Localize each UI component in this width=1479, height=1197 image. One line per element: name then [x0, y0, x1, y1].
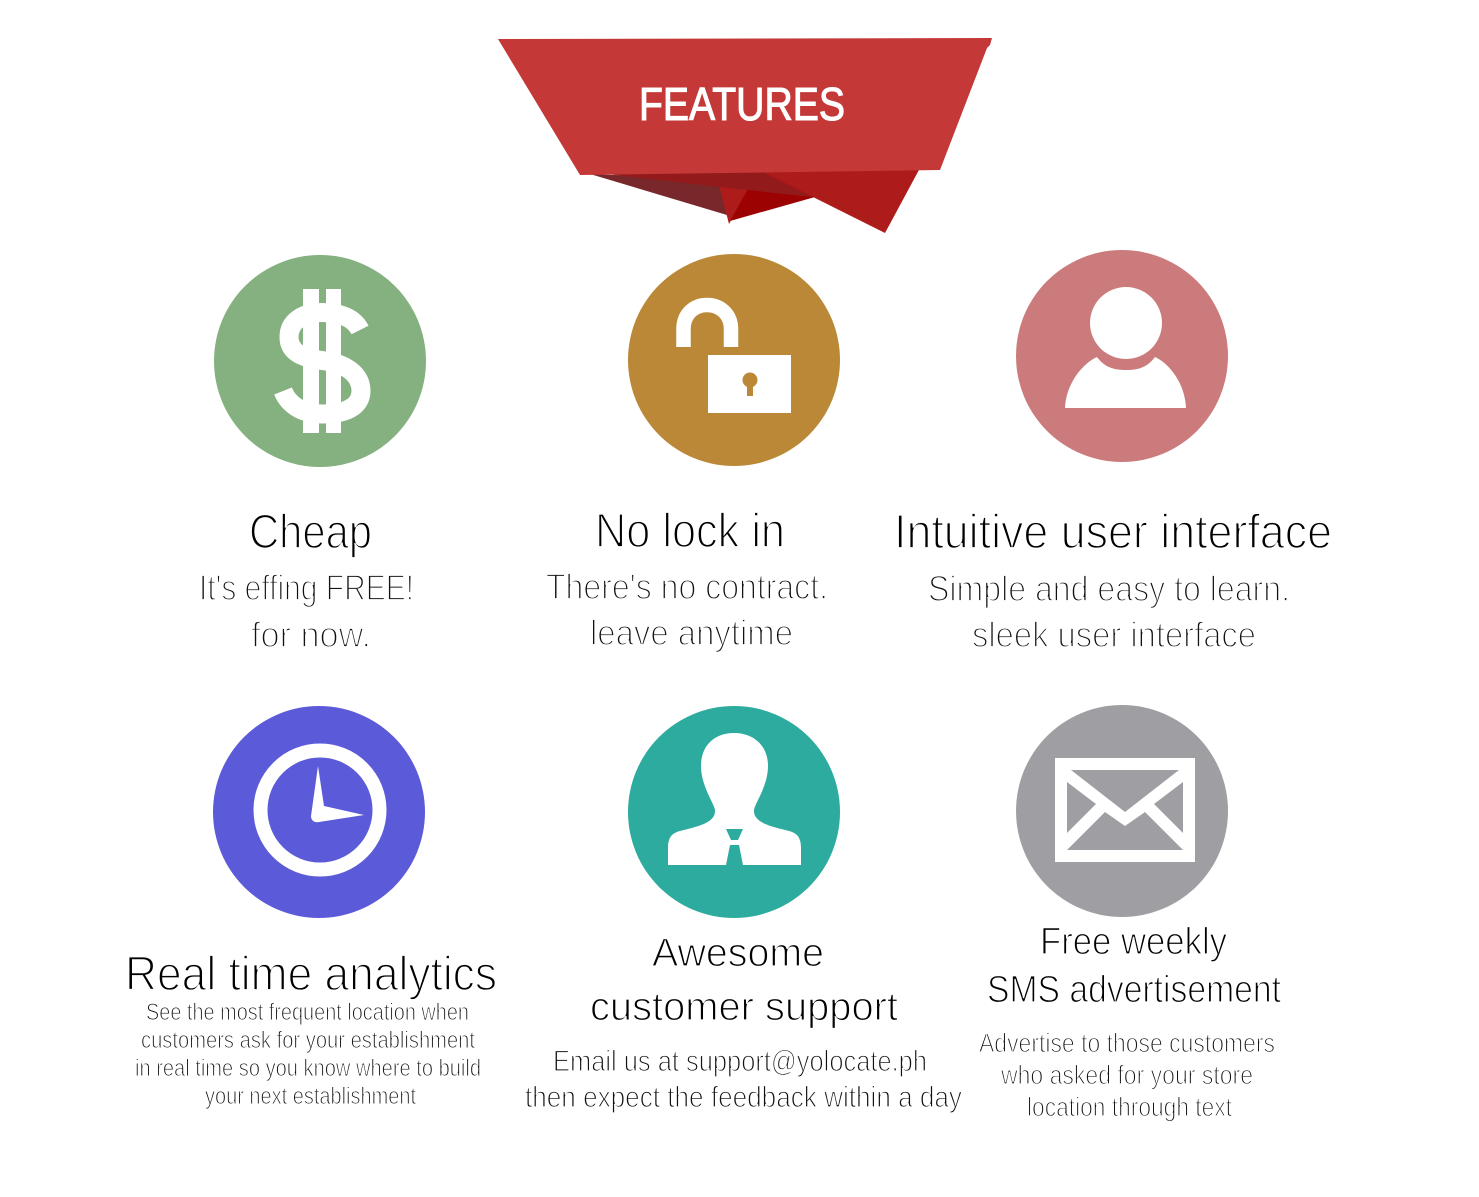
description: sleek user interface: [972, 614, 1256, 655]
panel: awesome customer support: [525, 706, 962, 1114]
heading: Awesome: [652, 931, 824, 975]
description: [525, 1045, 962, 1114]
description: then expect the feedback within a day: [525, 1081, 962, 1114]
heading: Free weekly: [1040, 921, 1227, 963]
icon: open padlock: [628, 254, 840, 466]
description: [546, 566, 828, 653]
heading: [987, 921, 1281, 1011]
panel: no lock in: [546, 254, 840, 653]
description: your next establishment: [205, 1083, 416, 1110]
description: [979, 1028, 1275, 1122]
description: [135, 999, 481, 1110]
description: leave anytime: [590, 612, 793, 653]
heading: No lock in: [595, 505, 785, 558]
description: [928, 568, 1290, 655]
description: There's no contract.: [546, 566, 828, 607]
description: who asked for your store: [1000, 1060, 1253, 1090]
icon: envelope: [1016, 705, 1228, 917]
heading: customer support: [590, 985, 898, 1029]
description: Simple and easy to learn.: [928, 568, 1290, 609]
description: customers ask for your establishment: [141, 1027, 475, 1054]
description: Advertise to those customers: [979, 1028, 1275, 1058]
heading: Intuitive user interface: [894, 506, 1332, 559]
heading: Cheap: [249, 506, 372, 559]
description: Email us at support@yolocate.ph: [553, 1045, 927, 1078]
icon: support agent: [628, 706, 840, 918]
description: [199, 567, 414, 655]
icon: user: [1016, 250, 1228, 462]
panel: real time analytics: [125, 706, 497, 1110]
banner: features: [498, 38, 992, 233]
icon: clock: [213, 706, 425, 918]
heading: [590, 931, 898, 1029]
description: See the most frequent location when: [146, 999, 469, 1026]
heading: Real time analytics: [125, 948, 497, 1001]
panel: free weekly sms advertisement: [979, 705, 1281, 1122]
icon: dollar: [214, 255, 426, 467]
panel: intuitive user interface: [894, 250, 1332, 655]
panel: cheap: [199, 255, 426, 655]
description: location through text: [1027, 1092, 1232, 1122]
banner title: FEATURES: [639, 78, 845, 130]
description: in real time so you know where to build: [135, 1055, 481, 1082]
description: for now.: [251, 614, 371, 655]
description: It's effing FREE!: [199, 567, 414, 608]
heading: SMS advertisement: [987, 969, 1281, 1011]
